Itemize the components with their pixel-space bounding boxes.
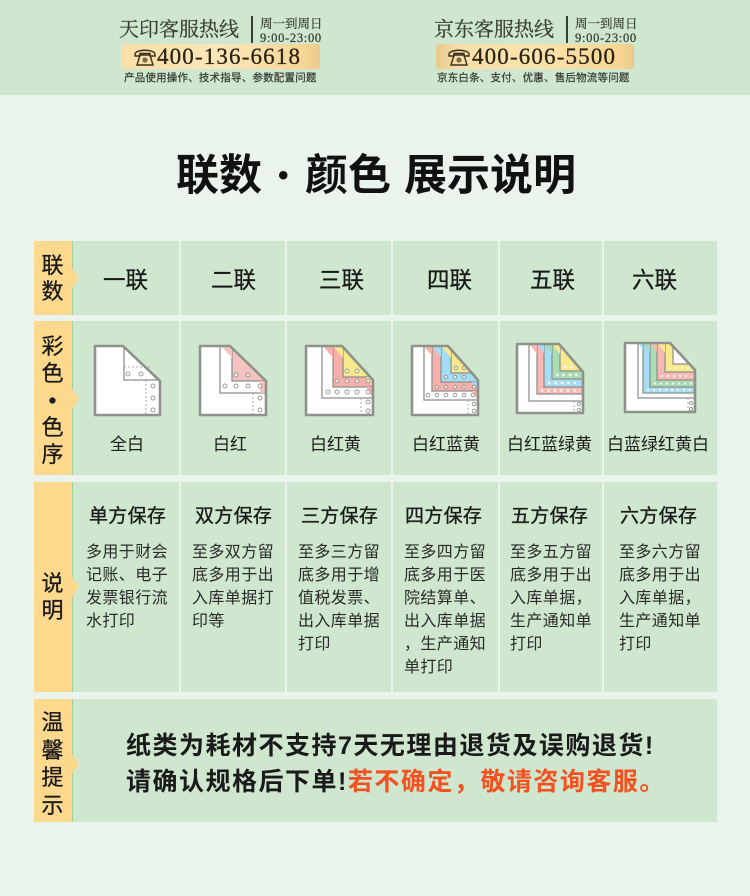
colour: 全白: 全白: [110, 435, 144, 454]
icon: two-part sheet: [198, 344, 268, 416]
title: •: [278, 159, 289, 192]
icon: six-part sheet: [624, 342, 696, 414]
icon: five-part sheet: [516, 342, 584, 414]
icon: one-part sheet: [94, 344, 162, 416]
Tianyin phone bar: [122, 44, 320, 69]
label text: 彩: [41, 334, 64, 359]
header band: [0, 0, 750, 95]
JD hours: [566, 16, 638, 43]
text: one-part use: 水打印: [86, 613, 135, 630]
column: 四联: 四联: [427, 268, 472, 293]
label text: 数: [41, 279, 64, 304]
colour: 白红蓝黄: 白红蓝黄: [412, 435, 480, 454]
heading: 四方保存: 四方保存: [405, 506, 482, 527]
JD phone bar: [436, 44, 634, 69]
Tianyin hours: 周一到周日: [260, 17, 323, 31]
Tianyin hotline heading: 天印客服热线: [119, 19, 239, 41]
text: six-part use: 至多六方留: [619, 544, 701, 561]
Tianyin phone number: 400-136-6618: [157, 44, 301, 69]
text: five-part use: 生产通知单: [510, 613, 592, 630]
JD hotline heading: 京东客服热线: [434, 19, 554, 41]
text: six-part use: 底多用于出: [619, 567, 701, 584]
icon: four-part sheet: [410, 344, 480, 416]
text: four-part use: 单打印: [404, 659, 453, 676]
label text: 说: [41, 571, 64, 596]
row: description label: [34, 482, 73, 692]
text: six-part use: [619, 543, 701, 653]
label text: •: [49, 388, 56, 413]
heading: 三方保存: 三方保存: [301, 506, 378, 527]
text: three-part use: 值税发票、: [298, 590, 380, 607]
label text: 色: [41, 415, 64, 440]
text: two-part use: [192, 543, 274, 630]
label text: [41, 253, 64, 304]
Tianyin hours: [251, 16, 323, 43]
title: 展示说明: [404, 152, 576, 200]
panel: notice: [73, 699, 717, 822]
label text: [41, 710, 64, 818]
text: four-part use: [404, 543, 486, 676]
label text: [41, 571, 64, 623]
icon: three-part sheet: [304, 344, 374, 416]
notice line 2: 请确认规格后下单!若不确定，敬请咨询客服。: [126, 768, 666, 796]
text: one-part use: 多用于财会: [86, 544, 168, 561]
label text: 联: [41, 253, 64, 278]
title: 联数: [176, 152, 262, 200]
colour: 白红蓝绿黄: 白红蓝绿黄: [507, 435, 592, 454]
text: three-part use: 至多三方留: [298, 544, 380, 561]
text: five-part use: 入库单据，: [510, 590, 592, 607]
title: 颜色: [305, 152, 391, 200]
text: six-part use: 入库单据，: [619, 590, 701, 607]
notice line 1: 纸类为耗材不支持7天无理由退货及误购退货!: [126, 732, 655, 760]
label text: 示: [41, 792, 64, 818]
text: five-part use: [510, 543, 592, 653]
text: three-part use: 出入库单据: [298, 613, 380, 630]
heading: 双方保存: 双方保存: [195, 506, 272, 527]
JD hours: 周一到周日: [575, 17, 638, 31]
text: two-part use: 入库单据打: [192, 590, 274, 607]
row: sheet count label: [34, 241, 73, 315]
column: 五联: 五联: [530, 268, 575, 293]
icon: telephone: [448, 50, 470, 66]
Tianyin hours: 9:00-23:00: [260, 31, 322, 45]
JD hours: 9:00-23:00: [575, 31, 637, 45]
text: five-part use: 打印: [510, 636, 543, 653]
text: four-part use: 出入库单据: [404, 613, 486, 630]
row: colour order label: [34, 321, 73, 475]
heading: 单方保存: 单方保存: [89, 506, 166, 527]
label text: 明: [41, 598, 64, 623]
Tianyin service scope: 产品使用操作、技术指导、参数配置问题: [124, 72, 317, 84]
text: one-part use: 发票银行流: [86, 590, 168, 607]
text: two-part use: 底多用于出: [192, 567, 274, 584]
colour: 白红黄: 白红黄: [310, 435, 361, 454]
label text: 序: [41, 442, 64, 467]
icon: telephone: [134, 50, 156, 66]
colour: 白蓝绿红黄白: 白蓝绿红黄白: [607, 435, 709, 454]
column: 六联: 六联: [632, 268, 677, 293]
text: six-part use: 生产通知单: [619, 613, 701, 630]
text: four-part use: 至多四方留: [404, 544, 486, 561]
JD service scope: 京东白条、支付、优惠、售后物流等问题: [437, 72, 630, 84]
text: four-part use: ，生产通知: [404, 636, 486, 653]
title: [176, 152, 576, 200]
label text: 提: [41, 765, 64, 790]
text: two-part use: 印等: [192, 613, 225, 630]
label text: [41, 334, 64, 467]
colour: 白红: 白红: [213, 435, 247, 454]
text: three-part use: 打印: [298, 636, 331, 653]
text: two-part use: 至多双方留: [192, 544, 274, 561]
text: five-part use: 底多用于出: [510, 567, 592, 584]
JD phone number: 400-606-5500: [472, 44, 616, 69]
heading: 五方保存: 五方保存: [511, 506, 588, 527]
text: three-part use: [298, 543, 380, 653]
text: one-part use: [86, 543, 168, 630]
label text: 温: [41, 710, 64, 735]
label text: 馨: [41, 738, 64, 762]
column: 一联: 一联: [103, 268, 148, 293]
text: four-part use: 底多用于医: [404, 567, 486, 584]
column: 二联: 二联: [211, 268, 256, 293]
text: four-part use: 院结算单、: [404, 590, 486, 607]
text: one-part use: 记账、电子: [86, 567, 168, 584]
text: six-part use: 打印: [619, 636, 652, 653]
column: 三联: 三联: [319, 268, 364, 293]
text: five-part use: 至多五方留: [510, 544, 592, 561]
text: three-part use: 底多用于增: [298, 567, 380, 584]
row: notice label: [34, 699, 73, 822]
heading: 六方保存: 六方保存: [620, 506, 697, 527]
label text: 色: [41, 361, 64, 386]
